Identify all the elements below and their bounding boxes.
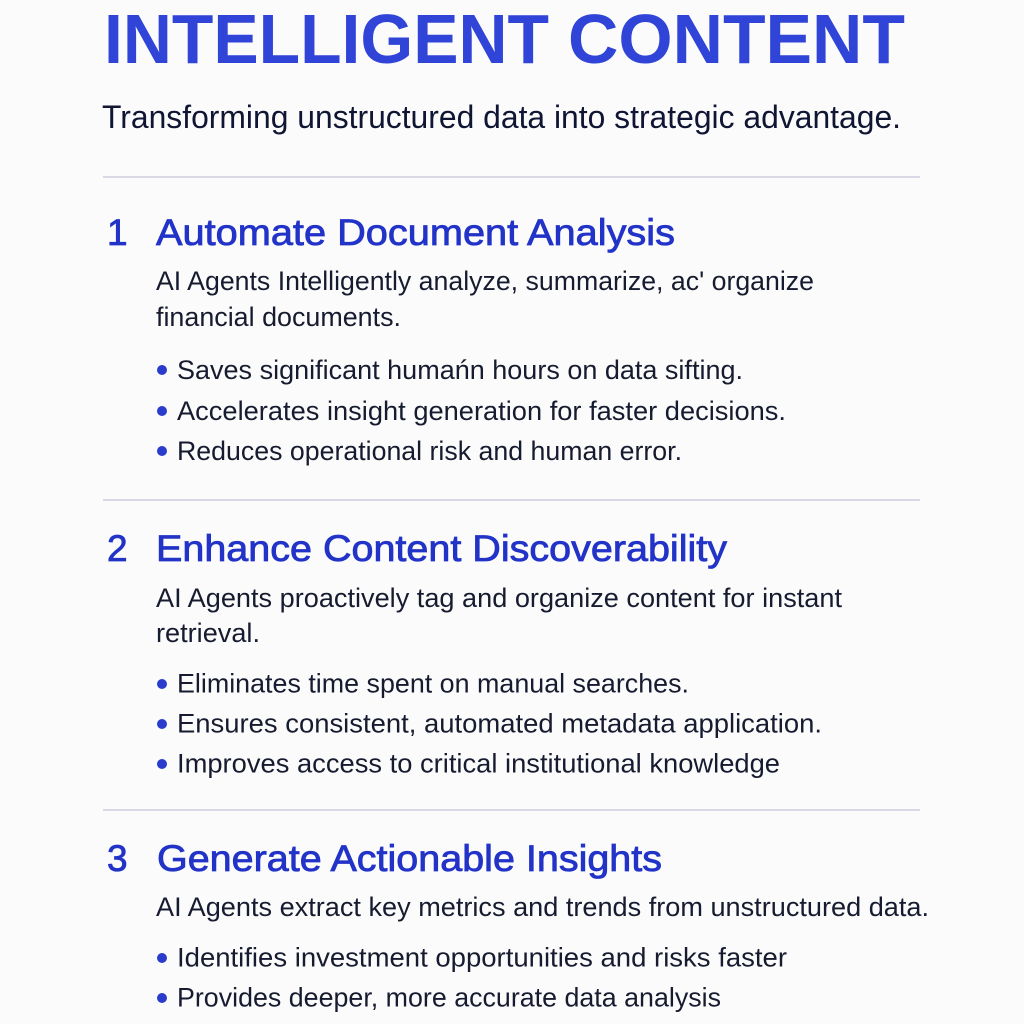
bullet list: Identifies investment opportunities and risks faster <box>177 942 787 972</box>
heading: generate actionable insights: Generate Actionable Insights <box>157 838 662 879</box>
section number 2: 2 <box>107 528 128 569</box>
description <box>156 266 814 332</box>
section number 3: 3 <box>107 838 128 879</box>
description: retrieval. <box>156 618 260 648</box>
panel: enhance content discoverability <box>107 528 843 778</box>
description: AI Agents Intelligently analyze, summarize, ac' organize <box>156 266 814 296</box>
bullet list: Eliminates time spent on manual searches. <box>177 668 689 698</box>
bullet list: Reduces operational risk and human error. <box>177 436 682 466</box>
bullet list: Accelerates insight generation for faster decisions. <box>177 396 786 426</box>
bullet list: Saves significant humańn hours on data sifting. <box>177 355 743 385</box>
subtitle: Transforming unstructured data into strategic advantage. <box>102 99 901 135</box>
panel: generate actionable insights <box>107 838 929 1012</box>
title <box>104 0 905 78</box>
bullet list <box>157 355 786 466</box>
section number 1: 1 <box>107 212 128 253</box>
bullet list: Ensures consistent, automated metadata application. <box>177 708 822 738</box>
title: INTELLIGENT <box>104 0 549 78</box>
description: financial documents. <box>156 302 401 332</box>
bullet list: Improves access to critical institutional knowledge <box>177 748 780 778</box>
bullet list <box>157 942 787 1012</box>
description: AI Agents extract key metrics and trends from unstructured data. <box>156 892 929 922</box>
heading: enhance content discoverability: Enhance Content Discoverability <box>156 528 728 569</box>
bullet list <box>157 668 822 778</box>
description <box>156 583 843 648</box>
description: AI Agents proactively tag and organize content for instant <box>156 583 843 613</box>
title: CONTENT <box>568 0 905 78</box>
heading: automate document analysis: Automate Document Analysis <box>156 212 675 253</box>
bullet list: Provides deeper, more accurate data analysis <box>177 982 721 1012</box>
panel: automate document analysis <box>107 212 814 466</box>
